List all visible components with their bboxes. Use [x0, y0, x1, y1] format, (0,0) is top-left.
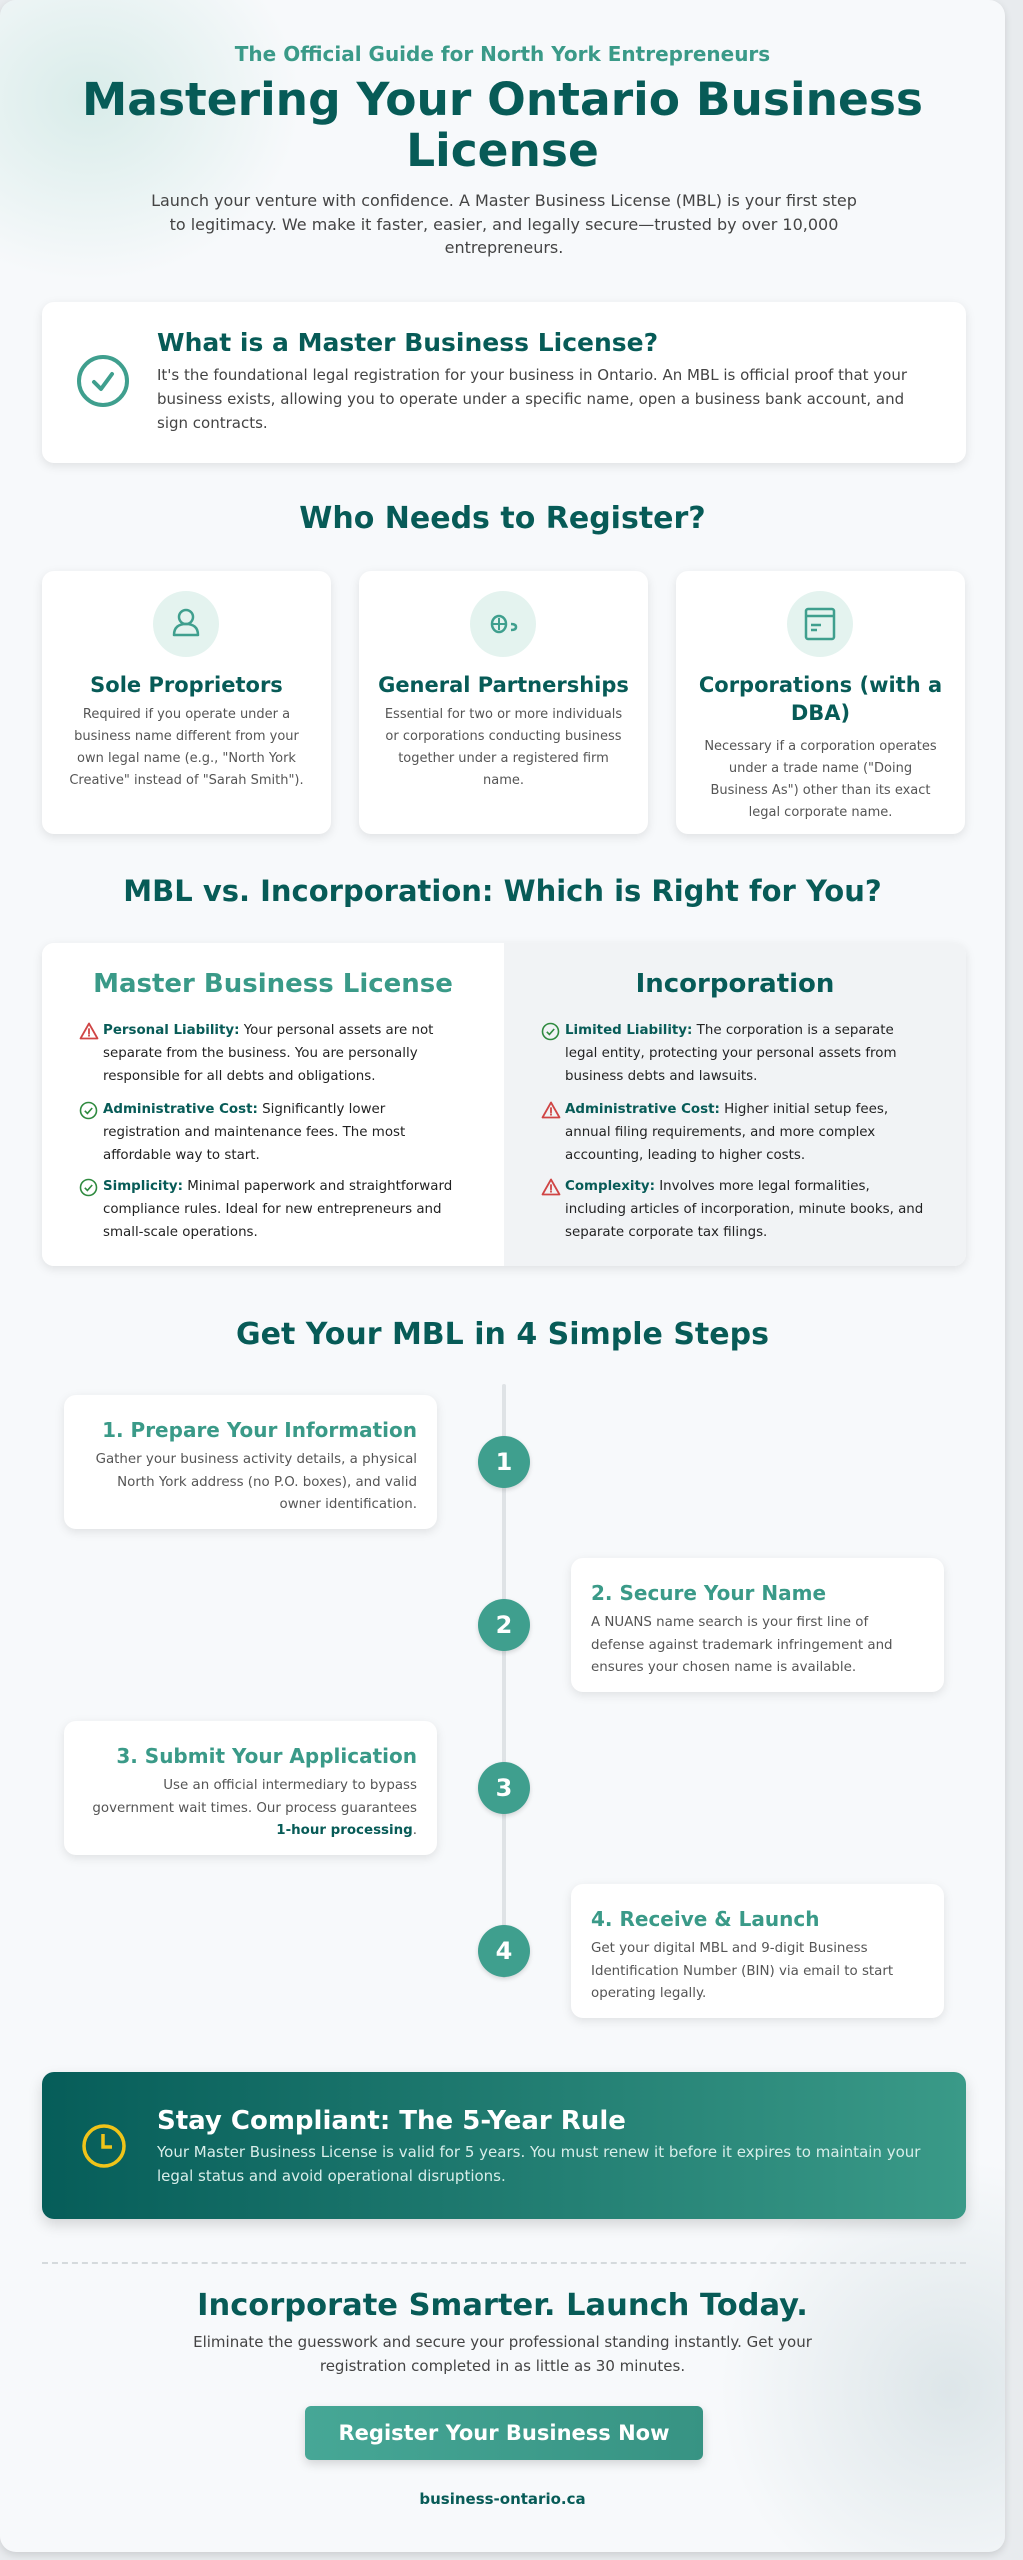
- item: admin cost: Administrative Cost: Significantly lower registration and maintenance fees. The most affordable way to start.: [103, 1102, 405, 1163]
- step 1: 1. Prepare Your Information: [102, 1418, 417, 1442]
- timeline: 4: [496, 1937, 512, 1965]
- footer url: business-ontario.ca: [419, 2490, 586, 2508]
- item: limited liability: Limited Liability: The corporation is a separate legal entity, protecting your personal assets from business debts and lawsuits.: [565, 1023, 896, 1084]
- button: Register Your Business Now: [338, 2421, 669, 2445]
- item: complexity: Complexity: Involves more legal formalities, including articles of incorporation, minute books, and separate corporate tax filings.: [565, 1179, 923, 1240]
- timeline: 2: [496, 1611, 512, 1639]
- panel: general partnerships: General Partnerships: [378, 673, 629, 697]
- main title: [82, 73, 923, 177]
- kicker subtitle: The Official Guide for North York Entrepreneurs: [235, 42, 770, 66]
- step 3: Use an official intermediary to bypass government wait times. Our process guarantees 1-hour processing.: [92, 1778, 417, 1838]
- CTA text: Eliminate the guesswork and secure your professional standing instantly. Get your registration completed in as little as 30 minutes.: [193, 2333, 812, 2374]
- heading: 4 steps: Get Your MBL in 4 Simple Steps: [236, 1317, 769, 1352]
- heading: who needs to register: Who Needs to Register?: [299, 501, 706, 536]
- step 3: [64, 1721, 437, 1855]
- button: [305, 2406, 703, 2460]
- step 1: [64, 1395, 437, 1529]
- step 2: A NUANS name search is your first line of defense against trademark infringement and ensures your chosen name is available.: [591, 1615, 893, 1675]
- callout: 5-year rule: Stay Compliant: The 5-Year Rule: [157, 2106, 626, 2136]
- step 1: Gather your business activity details, a physical North York address (no P.O. boxes), and valid owner identification.: [96, 1452, 417, 1512]
- CTA heading: Incorporate Smarter. Launch Today.: [197, 2288, 808, 2323]
- main title: Mastering Your Ontario Business: [82, 73, 923, 126]
- panel: sole proprietors: Sole Proprietors: [90, 673, 283, 697]
- icon: person: [153, 591, 219, 657]
- item: personal liability: Personal Liability: Your personal assets are not separate from the business. You are personally responsible for all debts and obligations.: [103, 1023, 433, 1084]
- panel: comparison: [42, 943, 966, 1266]
- body text: It's the foundational legal registration for your business in Ontario. An MBL is official proof that your business exists, allowing you to operate under a specific name, open a business bank account, and sign contracts.: [157, 366, 907, 432]
- item: simplicity: Simplicity: Minimal paperwork and straightforward compliance rules. Ideal for new entrepreneurs and small-scale operations.: [103, 1179, 452, 1240]
- panel: what is MBL: [42, 302, 966, 463]
- step 4: [571, 1884, 944, 2018]
- heading: What is a Master Business License?: [157, 328, 658, 357]
- column: incorporation: [504, 943, 966, 1266]
- step 4: Get your digital MBL and 9-digit Business Identification Number (BIN) via email to start operating legally.: [591, 1941, 893, 2001]
- timeline: [62, 1384, 946, 2023]
- main title: License: [406, 124, 599, 177]
- step 3: 3. Submit Your Application: [116, 1744, 417, 1768]
- panel: corporations: Corporations (with a DBA): [699, 673, 942, 725]
- panel: sole proprietors: [42, 571, 331, 834]
- callout: 5-year rule: Your Master Business License is valid for 5 years. You must renew it before it expires to maintain your legal status and avoid operational disruptions.: [157, 2143, 920, 2185]
- intro paragraph: Launch your venture with confidence. A Master Business License (MBL) is your first step to legitimacy. We make it faster, easier, and legally secure—trusted by over 10,000 entrepreneurs.: [151, 191, 857, 257]
- icon: document: [787, 591, 853, 657]
- panel: corporations: [676, 571, 965, 834]
- icon: check circle: [77, 355, 129, 407]
- panel: sole proprietors: Required if you operate under a business name different from your own legal name (e.g., "North York Creative" instead of "Sarah Smith").: [69, 707, 304, 788]
- icon: handshake: [470, 591, 536, 657]
- step 2: 2. Secure Your Name: [591, 1581, 826, 1605]
- step 4: 4. Receive & Launch: [591, 1907, 820, 1931]
- item: admin cost: Administrative Cost: Higher initial setup fees, annual filing requirements, and more complex accounting, leading to higher costs.: [565, 1102, 888, 1163]
- column: MBL: Master Business License: [93, 969, 453, 999]
- heading: MBL vs incorporation: MBL vs. Incorporation: Which is Right for You?: [123, 874, 882, 908]
- panel: general partnerships: Essential for two or more individuals or corporations conducting business together under a registered firm name.: [385, 707, 622, 788]
- timeline: 3: [496, 1774, 512, 1802]
- timeline: 1: [496, 1448, 512, 1476]
- column: incorporation: Incorporation: [636, 969, 834, 999]
- column: MBL: [42, 943, 504, 1266]
- icon: clock: [82, 2124, 126, 2168]
- panel: corporations: Necessary if a corporation operates under a trade name ("Doing Business As") other than its exact legal corporate name.: [704, 739, 937, 820]
- step 2: [571, 1558, 944, 1692]
- callout: 5-year rule: [42, 2072, 966, 2219]
- panel: general partnerships: [359, 571, 648, 834]
